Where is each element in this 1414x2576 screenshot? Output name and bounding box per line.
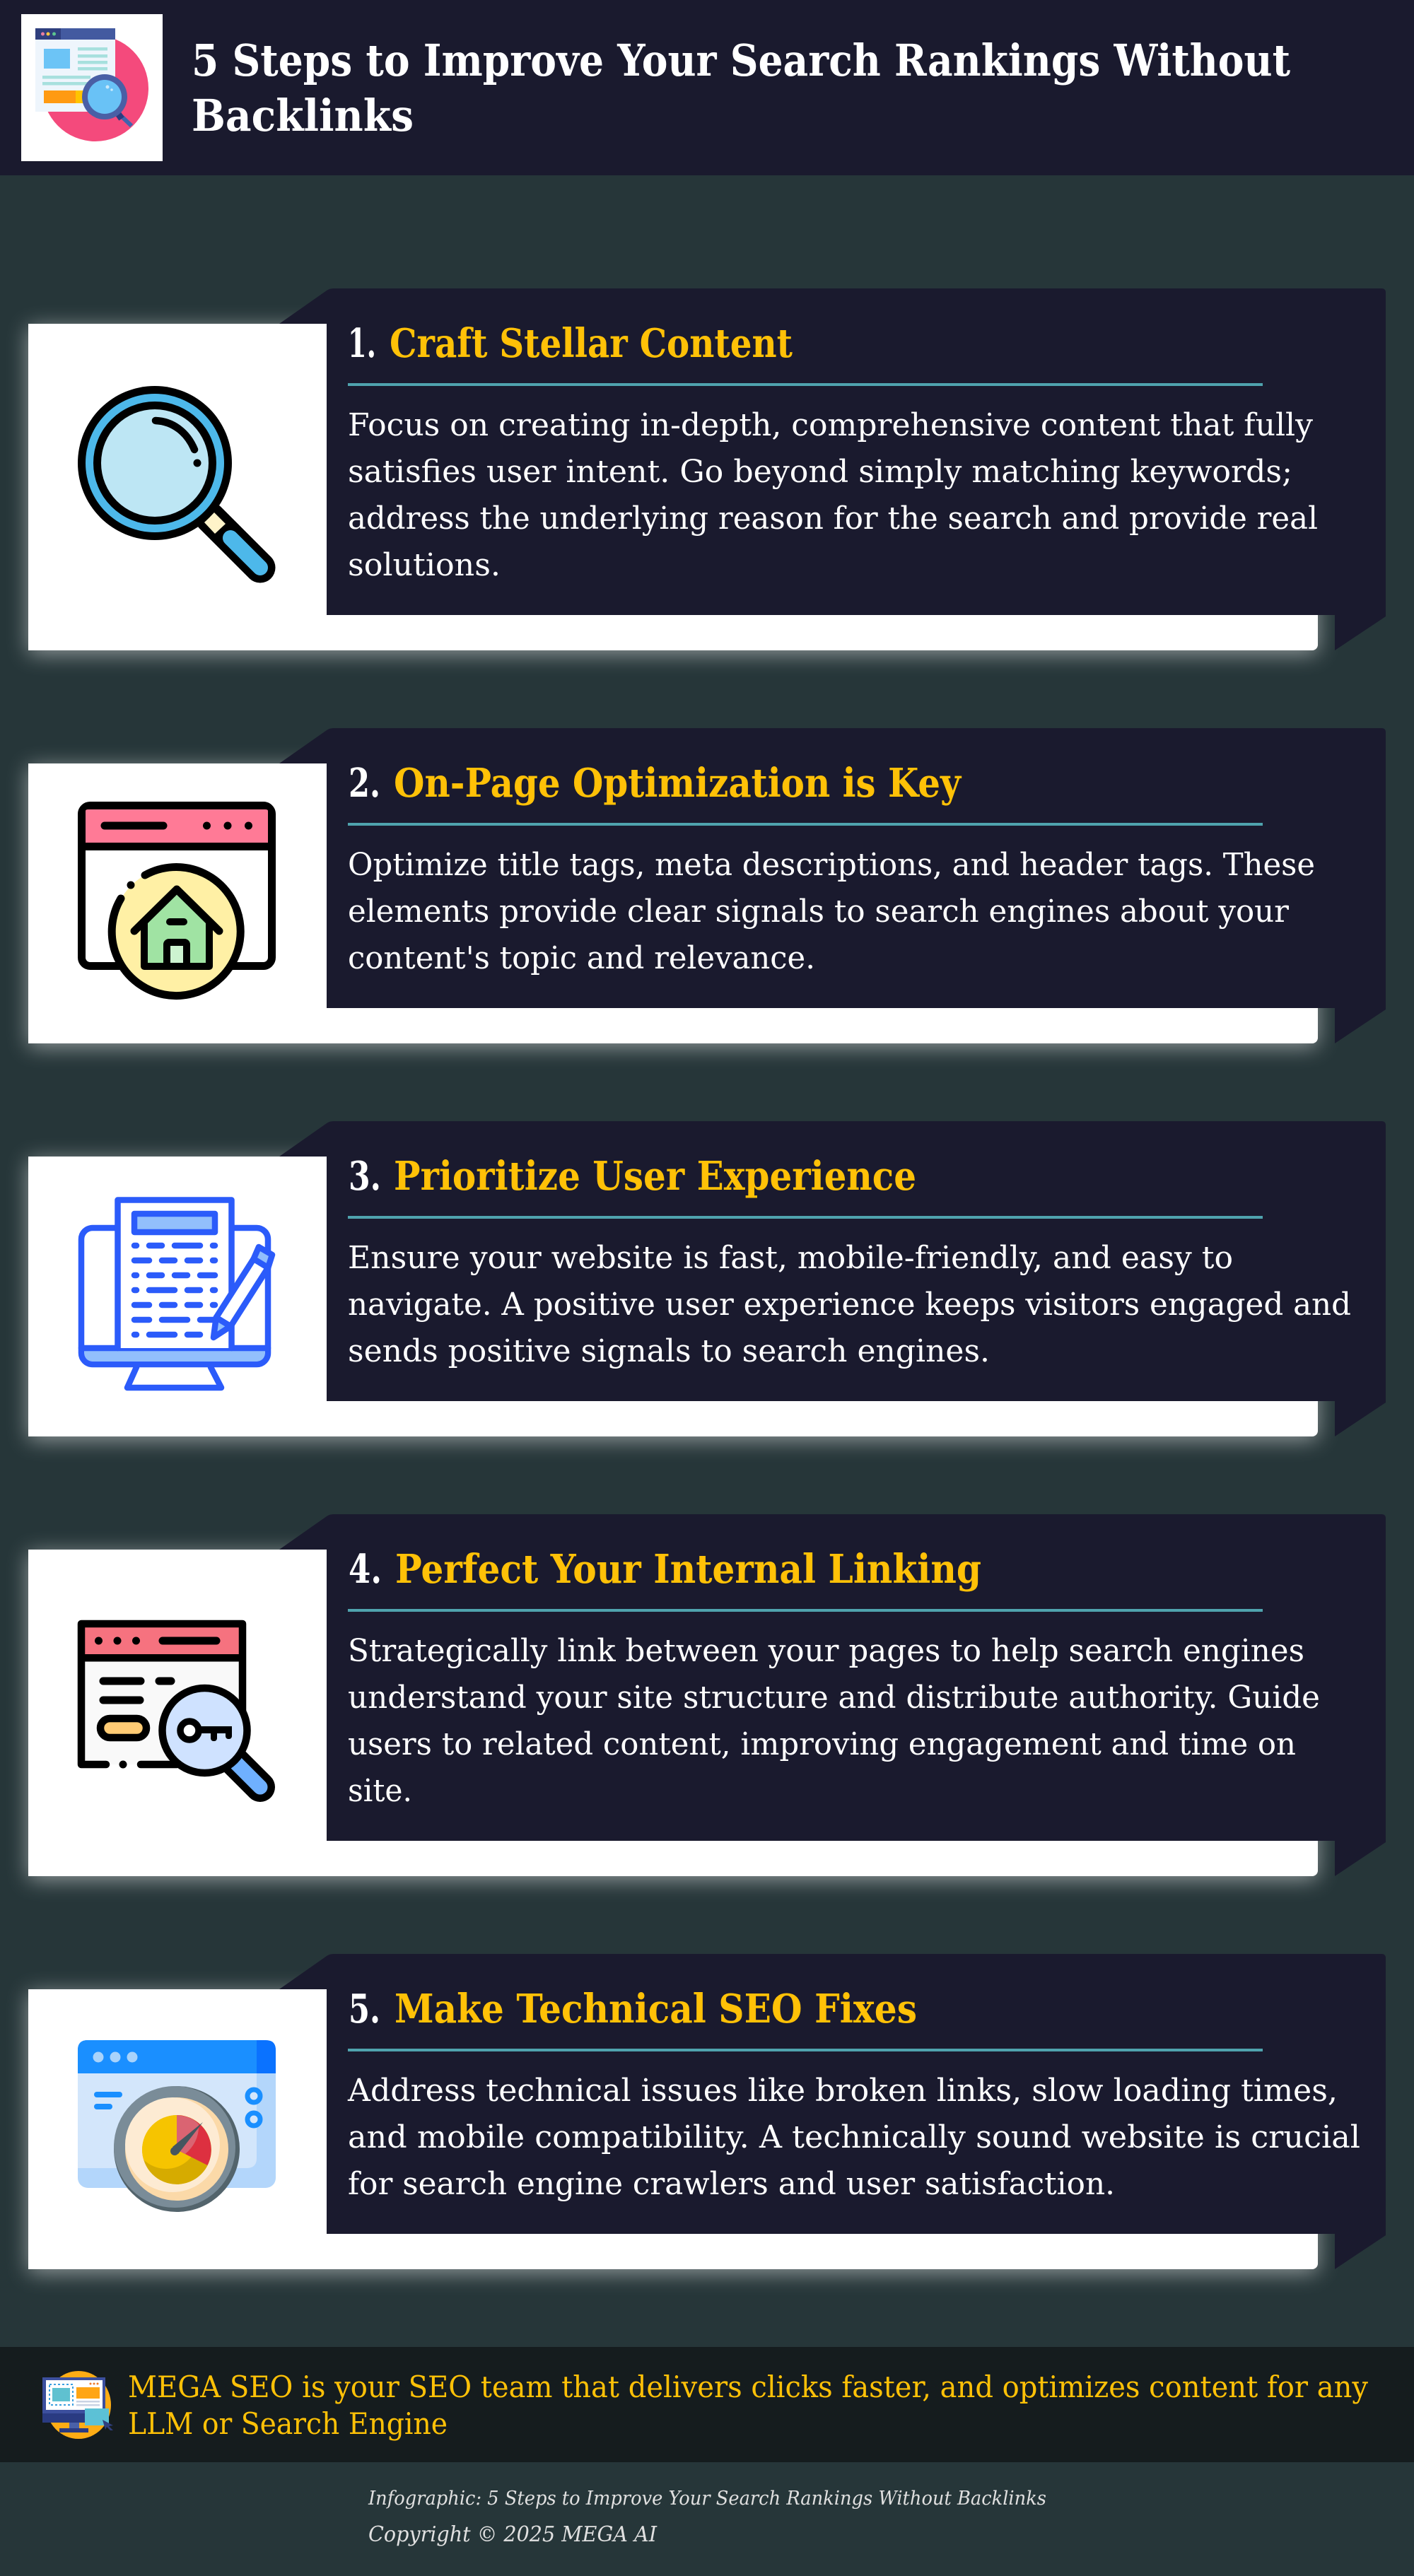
white card with glow xyxy=(28,324,1318,650)
step 1 body text: address the underlying reason for the search and provide real xyxy=(348,500,1318,537)
step 3 body text: Ensure your website is fast, mobile-friendly, and easy to xyxy=(348,1240,1233,1276)
step 4 body text: Strategically link between your pages to help search engines xyxy=(348,1633,1304,1669)
icon: monitor logo xyxy=(42,2371,113,2439)
step 1 heading xyxy=(348,320,1263,386)
step 5 body text: for search engine crawlers and user satisfaction. xyxy=(348,2166,1115,2202)
step 1 heading: 1. xyxy=(348,320,376,367)
step 5 heading xyxy=(348,1986,1263,2051)
header logo: browser page with magnifier xyxy=(21,14,163,161)
step 3 body text xyxy=(348,1240,1351,1369)
panel: step 1 craft stellar content xyxy=(14,288,1386,668)
step 4 body text: site. xyxy=(348,1773,412,1809)
white card with glow xyxy=(28,1989,1318,2269)
step 2 body text: elements provide clear signals to search engines about your xyxy=(348,894,1290,930)
header banner xyxy=(0,0,1414,175)
step 2 body text xyxy=(348,847,1315,976)
dark content panel with folded corners xyxy=(279,288,1386,650)
step 1 body text xyxy=(348,407,1318,583)
white card with glow xyxy=(28,763,1318,1043)
call-to-action text xyxy=(128,2370,1368,2441)
panel: step 2 on-page optimization xyxy=(14,728,1386,1061)
icon: browser window with speed gauge xyxy=(78,2040,276,2212)
step 3 heading: Prioritize User Experience xyxy=(394,1153,916,1200)
step 1 heading: Craft Stellar Content xyxy=(390,320,793,367)
step 4 body text: understand your site structure and distribute authority. Guide xyxy=(348,1680,1320,1716)
step 2 body text: Optimize title tags, meta descriptions, and header tags. These xyxy=(348,847,1315,883)
call-to-action text: MEGA SEO is your SEO team that delivers clicks faster, and optimizes content for any xyxy=(128,2370,1368,2404)
call-to-action banner xyxy=(0,2347,1414,2462)
step 1 body text: Focus on creating in-depth, comprehensive content that fully xyxy=(348,407,1313,443)
step 2 heading xyxy=(348,760,1263,826)
step 5 heading: Make Technical SEO Fixes xyxy=(395,1986,917,2032)
step 4 heading: 4. xyxy=(349,1546,382,1593)
icon: monitor with document and pencil xyxy=(78,1197,276,1391)
panel: step 3 user experience xyxy=(14,1121,1386,1454)
footer credits xyxy=(368,2488,1046,2547)
icon: magnifying glass xyxy=(78,386,276,582)
step 5 body text: Address technical issues like broken links, slow loading times, xyxy=(347,2073,1338,2109)
panel: step 5 technical seo xyxy=(14,1954,1386,2287)
step 3 body text: sends positive signals to search engines. xyxy=(348,1333,990,1369)
main title: 5 Steps to Improve Your Search Rankings Without xyxy=(192,35,1290,86)
step 3 heading: 3. xyxy=(349,1153,381,1200)
step 4 heading xyxy=(348,1546,1263,1612)
step 4 heading: Perfect Your Internal Linking xyxy=(395,1546,981,1593)
step 4 body text xyxy=(348,1633,1320,1809)
dark content panel with folded corners xyxy=(279,1954,1386,2269)
copyright line: Copyright © 2025 MEGA AI xyxy=(368,2522,658,2547)
panel: step 4 internal linking xyxy=(14,1514,1386,1894)
step 1 body text: solutions. xyxy=(348,547,501,583)
step 3 body text: navigate. A positive user experience keeps visitors engaged and xyxy=(348,1287,1351,1323)
step 5 body text xyxy=(347,2073,1360,2202)
dark content panel with folded corners xyxy=(279,728,1386,1043)
step 2 heading: 2. xyxy=(349,760,380,807)
step 3 heading xyxy=(348,1153,1263,1219)
dark content panel with folded corners xyxy=(279,1514,1386,1876)
step 5 body text: and mobile compatibility. A technically sound website is crucial xyxy=(348,2119,1360,2155)
icon: browser window with key magnifier xyxy=(78,1620,275,1802)
main title xyxy=(192,35,1290,141)
step 2 heading: On-Page Optimization is Key xyxy=(394,760,962,807)
dark content panel with folded corners xyxy=(279,1121,1386,1436)
step 4 body text: users to related content, improving engagement and time on xyxy=(348,1726,1296,1762)
icon: browser window with house xyxy=(78,802,276,1000)
white card with glow xyxy=(28,1157,1318,1436)
step 5 heading: 5. xyxy=(349,1986,380,2032)
step 2 body text: content's topic and relevance. xyxy=(348,940,815,976)
white card with glow xyxy=(28,1550,1318,1876)
main title: Backlinks xyxy=(192,90,414,141)
infographic source line: Infographic: 5 Steps to Improve Your Search Rankings Without Backlinks xyxy=(368,2488,1046,2510)
call-to-action text: LLM or Search Engine xyxy=(128,2406,448,2441)
step 1 body text: satisfies user intent. Go beyond simply matching keywords; xyxy=(348,454,1292,490)
